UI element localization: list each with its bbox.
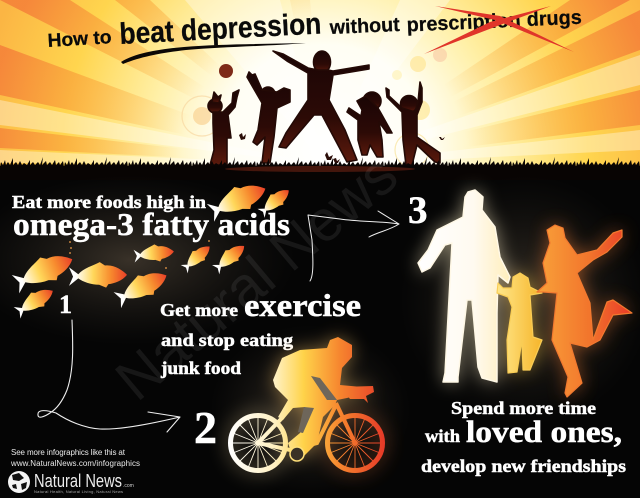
arrow to 3 [308,211,399,281]
logo: Natural News: Natural News [34,471,122,491]
title: beat depression [119,7,322,51]
watermark: Natural News [104,141,410,413]
butterflies [239,133,445,163]
heading: exercise: exercise [244,287,361,323]
glow: fish [0,175,295,345]
footer link text [10,448,140,468]
heading: omega-3: omega-3 fatty acids [13,206,290,242]
arrow from 1 to 2 [38,320,180,432]
logo: Natural News: Natural Health, Natural Living, Natural News [34,489,123,494]
text: loved ones [421,398,626,476]
family [418,190,632,397]
text: loved ones: develop new friendships [421,456,626,476]
woman [537,225,632,397]
title: prescription [406,10,521,36]
heading: exercise: Get more [160,300,238,320]
child silhouette 1 [208,90,239,165]
glow: cyclist [210,325,410,495]
child silhouette 4 [347,92,392,157]
logo: Natural News: .com [123,483,134,489]
title: How to [47,27,112,52]
glow: family [400,175,640,425]
decorative bubbles [182,48,447,167]
heading: exercise: junk food [160,358,241,378]
red cross-out [424,6,574,54]
number 1: 1 [59,290,72,319]
fish school [10,176,294,320]
child [497,273,542,373]
title: drugs [526,7,582,31]
heading: exercise [160,287,361,378]
grass horizon [0,153,640,180]
cyclist [230,337,383,471]
sky with sun rays [0,0,640,175]
child silhouette 5 [386,82,440,165]
footer link text: www.NaturalNews.com/infographics [10,459,140,468]
brush underline [121,43,306,64]
title [47,7,582,52]
child silhouette 2 [247,72,290,163]
heading: exercise: and stop eating [161,330,293,350]
ball [219,64,233,78]
text: loved ones: with [425,426,460,446]
logo: Natural News [8,471,134,494]
man [418,190,510,382]
number 2: 2 [194,402,217,453]
jumping figure silhouette [273,51,369,162]
footer link text: See more infographics like this at [11,448,126,457]
heading: omega-3: Eat more foods high in [12,192,206,212]
text: loved ones: Spend more time [451,398,596,418]
heading: omega-3 [12,192,290,242]
text: loved ones: loved ones, [466,414,622,449]
number 3: 3 [408,189,428,232]
title: without [328,14,400,39]
